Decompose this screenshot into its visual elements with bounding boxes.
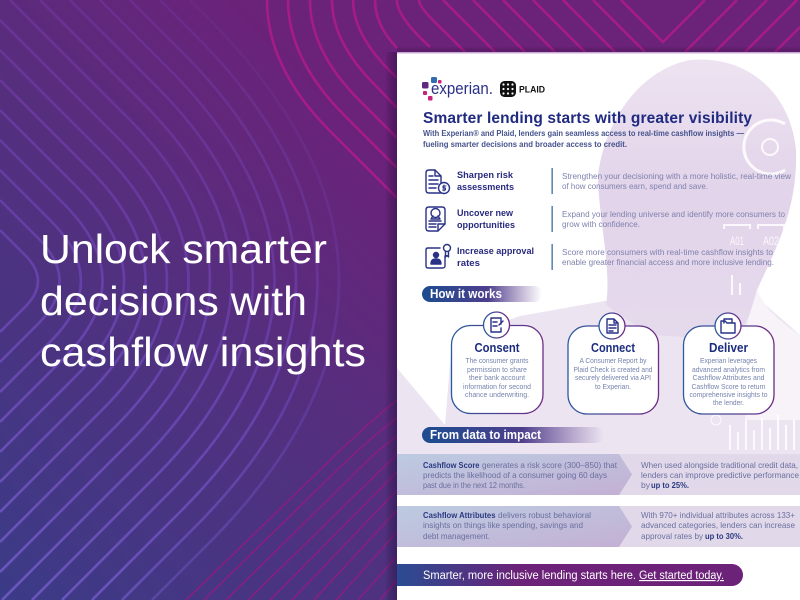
section heading: how it works: How it works bbox=[430, 287, 502, 301]
section heading: from data to impact bbox=[422, 427, 604, 443]
violet contour lines bbox=[0, 0, 339, 600]
card: deliver: advanced analytics from bbox=[692, 365, 765, 374]
call to action bar: Smarter, more inclusive lending starts here. bbox=[423, 570, 636, 582]
benefit: increase approval rates: Increase approval bbox=[457, 246, 534, 257]
impact band: cashflow attributes: advanced categories, lenders can increase bbox=[641, 520, 795, 530]
experian logo bbox=[422, 77, 493, 100]
benefit: sharpen risk assessments bbox=[426, 168, 792, 194]
card: deliver: Deliver bbox=[709, 340, 748, 355]
benefit: uncover new opportunities: grow with confidence. bbox=[562, 219, 640, 229]
plaid logo: PLAID bbox=[519, 84, 545, 94]
card: deliver bbox=[684, 313, 774, 414]
magenta contour lines, top bbox=[267, 0, 800, 198]
portrait watermark: A01 bbox=[730, 234, 744, 248]
card: consent: chance underwriting. bbox=[465, 390, 529, 399]
benefit: increase approval rates: enable greater financial access and more inclusive lending. bbox=[562, 257, 774, 267]
panel background bbox=[397, 52, 800, 600]
card: deliver: Experian leverages bbox=[700, 356, 757, 365]
impact band: cashflow attributes: Cashflow Attributes bbox=[423, 510, 496, 520]
headline: unlock smarter decisions: decisions with bbox=[40, 278, 307, 324]
benefit: sharpen risk assessments: Strengthen your decisioning with a more holistic, real-time view bbox=[562, 171, 792, 181]
card: consent bbox=[452, 312, 543, 414]
card: deliver: comprehensive insights to bbox=[690, 390, 768, 399]
card: consent: information for second bbox=[463, 382, 531, 391]
card: consent: Consent bbox=[474, 340, 520, 355]
impact band: cashflow score: up to 25%. bbox=[651, 480, 689, 490]
headline: unlock smarter decisions bbox=[40, 226, 366, 375]
impact band: cashflow attributes: approval rates by bbox=[641, 531, 704, 541]
card: consent: The consumer grants bbox=[466, 356, 529, 365]
impact band: cashflow attributes bbox=[397, 506, 800, 547]
benefit: uncover new opportunities bbox=[426, 206, 785, 232]
impact band: cashflow score: generates a risk score (300–850) that bbox=[482, 460, 618, 470]
drop shadow of document bbox=[385, 46, 800, 600]
icon: consent form bbox=[484, 312, 510, 338]
portrait watermark bbox=[397, 52, 800, 468]
headline: unlock smarter decisions: cashflow insights bbox=[40, 329, 366, 375]
card: deliver: Cashflow Score to return bbox=[692, 382, 766, 391]
icon: profile with ribbon bbox=[426, 244, 450, 268]
benefit: sharpen risk assessments: of how consumers earn, spend and save. bbox=[562, 181, 708, 191]
card: connect: Plaid Check is created and bbox=[574, 365, 652, 374]
card: connect: Connect bbox=[591, 340, 636, 355]
icon: consumer report bbox=[599, 313, 625, 339]
intro paragraph: With Experian® and Plaid, lenders gain seamless access to real-time cashflow insights — bbox=[423, 128, 744, 138]
call to action bar: Get started today. bbox=[639, 570, 724, 582]
document panel bbox=[397, 52, 800, 600]
card: deliver: the lender. bbox=[713, 398, 744, 407]
impact band: cashflow score bbox=[397, 454, 800, 495]
impact band: cashflow score: predicts the likelihood of a consumer going 60 days bbox=[423, 470, 607, 480]
benefit: sharpen risk assessments: assessments bbox=[457, 182, 514, 193]
experian logo: experian. bbox=[431, 80, 493, 98]
impact band: cashflow score: by bbox=[641, 480, 651, 490]
section heading: from data to impact: From data to impact bbox=[430, 428, 542, 442]
call to action bar bbox=[397, 564, 743, 586]
impact band: cashflow attributes: delivers robust behavioral bbox=[498, 510, 591, 520]
benefit: uncover new opportunities: Uncover new bbox=[457, 208, 513, 219]
document heading: Smarter lending starts with greater visibility bbox=[423, 110, 752, 127]
magenta contour lines, bottom bbox=[186, 400, 397, 600]
benefit: increase approval rates: rates bbox=[457, 258, 480, 269]
impact band: cashflow attributes: debt management. bbox=[423, 531, 490, 541]
plaid logo bbox=[500, 81, 545, 97]
headline: unlock smarter decisions: Unlock smarter bbox=[40, 226, 327, 272]
icon: magnified profile document bbox=[426, 207, 445, 231]
card: deliver: Cashflow Attributes and bbox=[692, 373, 764, 382]
benefit: increase approval rates: Score more consumers with real-time cashflow insights to bbox=[562, 247, 773, 257]
icon: document with dollar bbox=[426, 170, 450, 194]
card: connect: securely delivered via API bbox=[575, 373, 651, 382]
card: consent: their bank account bbox=[469, 373, 525, 382]
benefit: uncover new opportunities: opportunities bbox=[457, 220, 515, 231]
card: connect: to Experian. bbox=[595, 382, 631, 391]
card: connect bbox=[568, 313, 658, 414]
benefit: increase approval rates bbox=[426, 244, 774, 270]
benefit: uncover new opportunities: Expand your lending universe and identify more consumers to bbox=[562, 209, 785, 219]
benefit: sharpen risk assessments: Sharpen risk bbox=[457, 170, 514, 181]
card: connect: A Consumer Report by bbox=[580, 356, 647, 365]
impact band: cashflow score: Cashflow Score bbox=[423, 460, 480, 470]
section heading: how it works bbox=[422, 286, 542, 302]
portrait watermark: A02 bbox=[763, 234, 779, 248]
impact band: cashflow score: past due in the next 12 months. bbox=[423, 480, 525, 490]
intro paragraph bbox=[423, 128, 744, 149]
impact band: cashflow attributes: up to 30%. bbox=[705, 531, 743, 541]
icon: folder bbox=[715, 313, 741, 339]
card: consent: permission to share bbox=[467, 365, 527, 374]
intro paragraph: fueling smarter decisions and broader access to credit. bbox=[423, 139, 627, 149]
impact band: cashflow attributes: insights on things like spending, savings and bbox=[423, 520, 583, 530]
